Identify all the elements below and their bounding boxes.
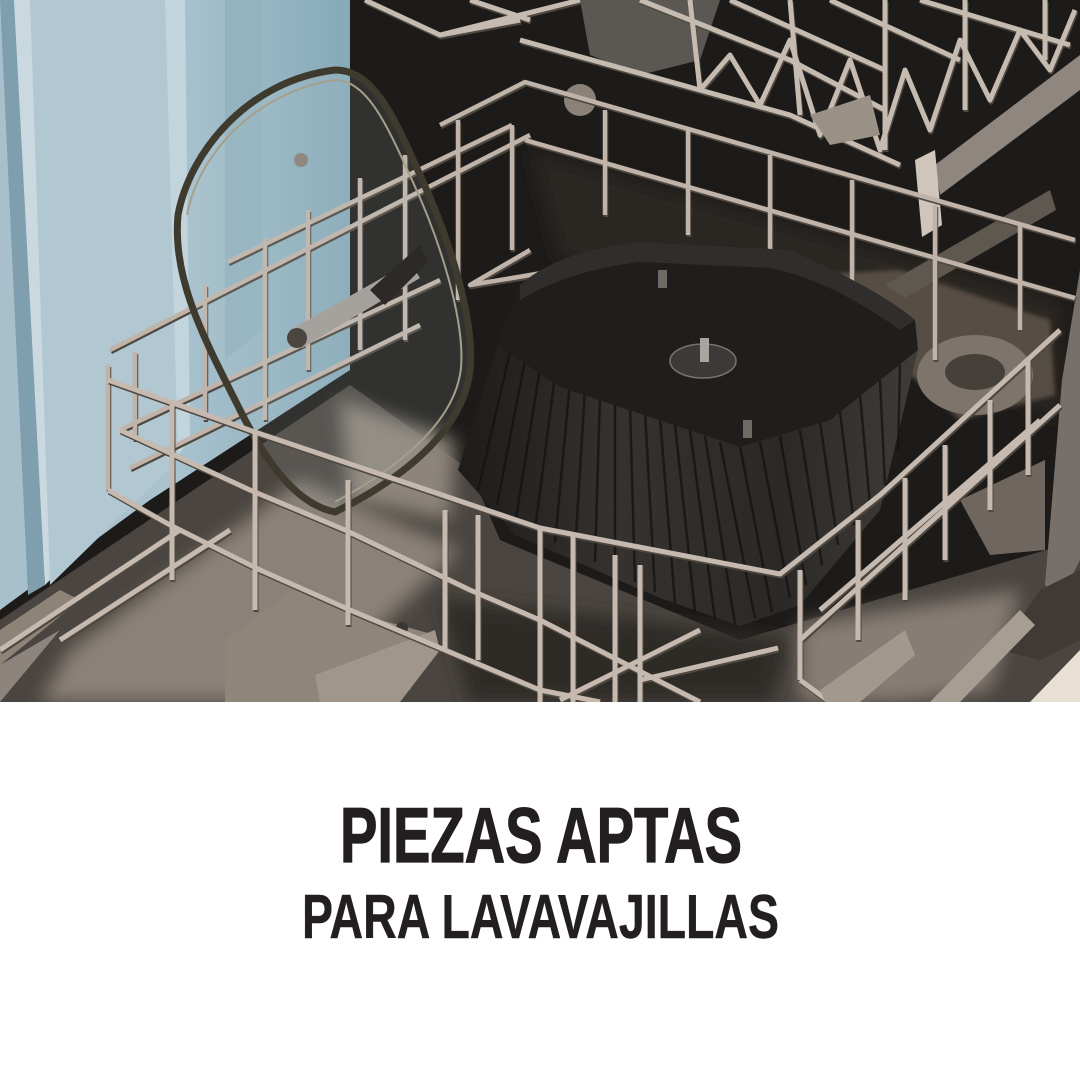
heating element and interior details bbox=[564, 84, 1056, 555]
rack hinge clip bbox=[820, 630, 915, 702]
glass lid with handle bbox=[177, 70, 471, 512]
photo: dishwasher scene bbox=[0, 0, 1080, 702]
upper rack wires bbox=[365, 0, 1075, 165]
basket ribbed side bbox=[458, 345, 918, 626]
subtitle: PARA LAVAVAJILLAS bbox=[302, 883, 779, 952]
lid knob bbox=[294, 153, 308, 167]
basket pins bbox=[658, 270, 752, 438]
title: PIEZAS APTAS bbox=[340, 791, 742, 879]
right door rail bbox=[930, 270, 1080, 702]
lower rack back wires bbox=[108, 82, 1075, 490]
lower rack front wires bbox=[0, 330, 1060, 702]
basket center fitting bbox=[670, 344, 736, 378]
glass jar on upper rack bbox=[580, 0, 720, 75]
dishwasher interior bbox=[0, 0, 1080, 702]
upper rack rail bbox=[810, 55, 1080, 237]
lid handle bbox=[290, 273, 420, 348]
air fryer basket bbox=[458, 242, 918, 626]
blue wall panels bbox=[0, 0, 350, 610]
white text panel bbox=[0, 702, 1080, 1080]
basket top surface bbox=[497, 242, 918, 447]
stainless steel floor bbox=[0, 385, 1080, 702]
interior shading bbox=[530, 150, 1060, 420]
detergent tray bbox=[225, 620, 439, 702]
